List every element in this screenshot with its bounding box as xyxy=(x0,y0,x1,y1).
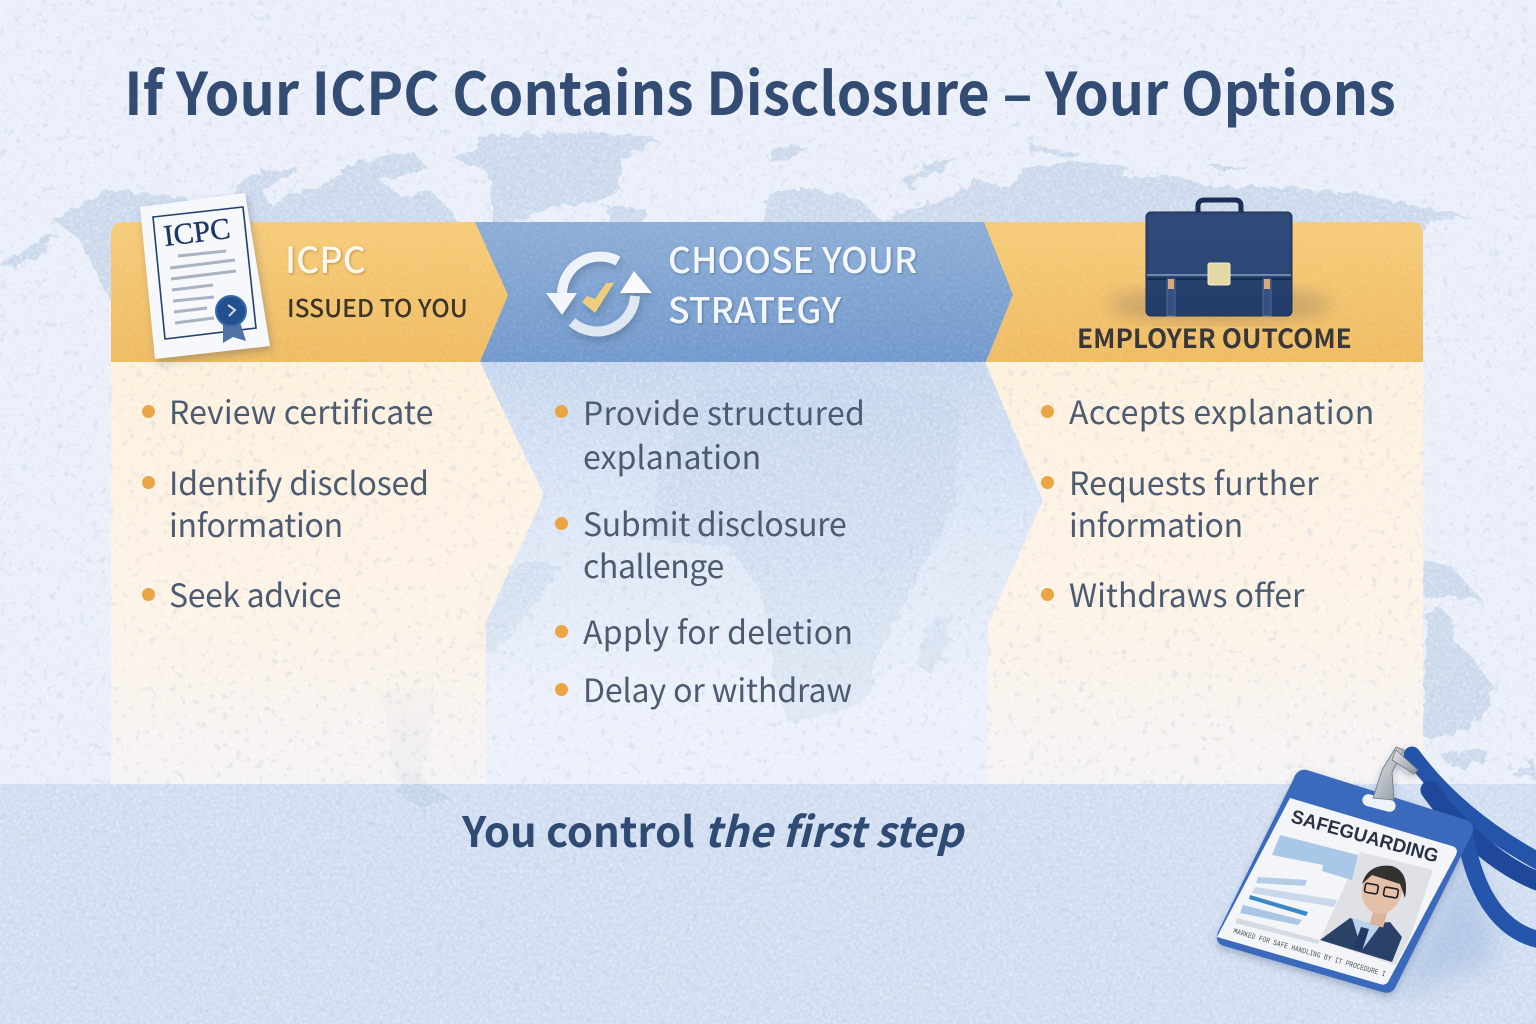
heading: choose your strategy xyxy=(668,233,918,334)
ID badge: SAFEGUARDING xyxy=(1289,807,1441,867)
heading: employer outcome: EMPLOYER OUTCOME xyxy=(1077,318,1352,356)
world map xyxy=(0,132,1536,806)
bullet: identify disclosed information: information xyxy=(169,501,343,547)
heading: ICPC: ICPC xyxy=(285,232,366,284)
bullet: submit disclosure challenge xyxy=(555,500,846,588)
bullet: requests further information xyxy=(1041,459,1319,547)
ID badge xyxy=(1217,747,1473,993)
bullet: accepts explanation: Accepts explanation xyxy=(1069,388,1375,434)
Australia xyxy=(1423,560,1482,600)
tagline: You control the first step xyxy=(462,800,963,860)
list: issued to you xyxy=(142,388,433,617)
icon: ICPC certificate: ICPC xyxy=(162,212,232,253)
bottom band xyxy=(0,784,1536,1024)
panel: strategy body xyxy=(480,362,1043,784)
panel: issued to you header xyxy=(111,222,508,362)
header grain xyxy=(111,222,1423,362)
bullet: delay or withdraw: Delay or withdraw xyxy=(583,666,852,712)
panel: employer outcome body xyxy=(985,362,1423,784)
icon: briefcase xyxy=(1146,200,1292,316)
Africa xyxy=(651,380,960,723)
heading: issued to you: ISSUED TO YOU xyxy=(287,289,468,325)
icon: strategy arrows xyxy=(546,256,652,331)
panel: employer outcome header xyxy=(984,222,1423,362)
list: strategy xyxy=(555,389,865,712)
South America xyxy=(470,560,560,650)
panel: strategy header xyxy=(470,222,1013,362)
bullet: requests further information: Requests further xyxy=(1069,459,1319,505)
bullet: requests further information: information xyxy=(1069,501,1243,547)
bullet: review certificate: Review certificate xyxy=(169,388,433,434)
heading: choose your strategy: STRATEGY xyxy=(668,283,841,334)
panel: issued to you body xyxy=(111,362,544,784)
list: employer outcome xyxy=(1041,388,1375,617)
bullet: provide structured explanation: Provide structured xyxy=(583,389,865,435)
bullet: identify disclosed information: Identify disclosed xyxy=(169,459,429,505)
ID badge shadow xyxy=(1390,840,1500,1000)
ID badge lanyard xyxy=(1412,755,1536,940)
icon: ICPC certificate xyxy=(140,193,270,359)
ID badge: MARKED FOR SAFE HANDLING BY IT PROCEDURE I xyxy=(1232,928,1386,979)
bullet: identify disclosed information xyxy=(142,459,429,547)
icon: briefcase shadow xyxy=(1108,287,1332,323)
bullet: submit disclosure challenge: Submit disclosure xyxy=(583,500,846,546)
heading: choose your strategy: CHOOSE YOUR xyxy=(668,233,917,284)
bullet: submit disclosure challenge: challenge xyxy=(583,542,724,588)
bullet: provide structured explanation: explanation xyxy=(583,433,761,479)
bullet: apply for deletion: Apply for deletion xyxy=(583,608,853,654)
title: If Your ICPC Contains Disclosure – Your Options xyxy=(124,47,1396,132)
bullet: provide structured explanation xyxy=(555,389,865,479)
bullet: seek advice: Seek advice xyxy=(169,571,341,617)
bullet: withdraws offer: Withdraws offer xyxy=(1069,571,1304,617)
